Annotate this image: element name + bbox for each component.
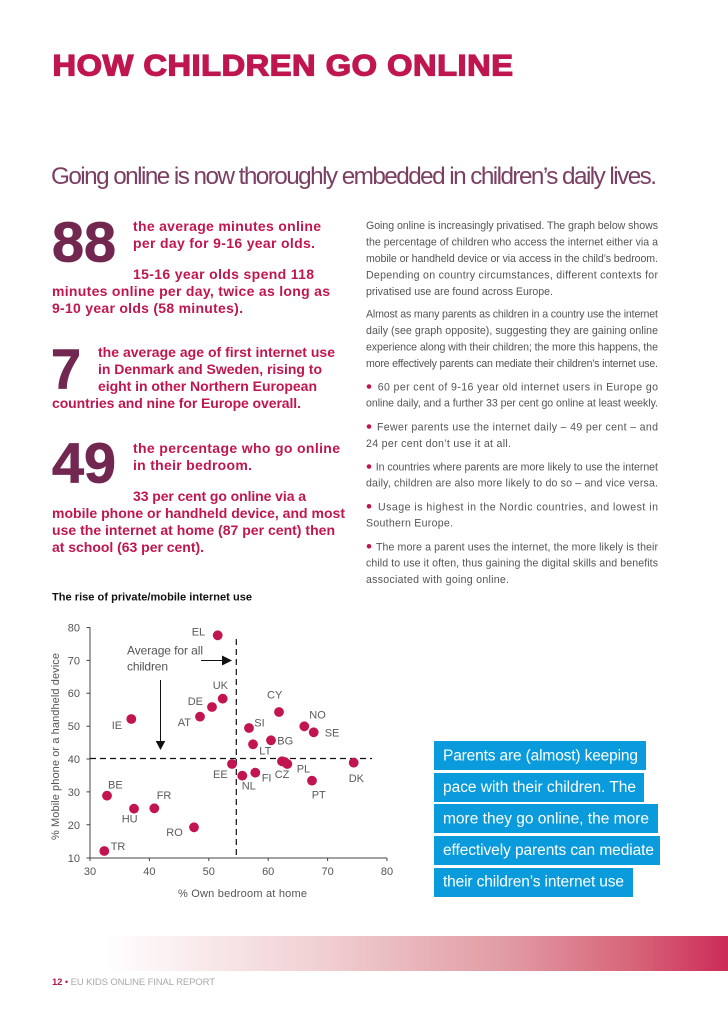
bullet: daily use: online daily, and a further 33 per cent go online at least weekly. xyxy=(366,398,658,410)
country labels: EL xyxy=(192,627,205,639)
big number 49: 49 xyxy=(52,432,116,496)
callout line 2: pace with their children. The xyxy=(443,779,636,796)
y axis title: % Mobile phone or a handheld device xyxy=(50,653,62,840)
country labels: LT xyxy=(259,746,272,758)
stat text: 33 per cent go online via a xyxy=(133,488,306,504)
arrow: right to vertical average xyxy=(201,656,232,666)
x axis tick labels xyxy=(84,866,393,878)
paragraph: privatised use: the percentage of children who access the internet either via a xyxy=(366,236,658,248)
scatter chart xyxy=(50,622,393,900)
bullet: daily use: 60 per cent of 9-16 year old internet users in Europe go xyxy=(378,382,658,394)
arrow: down to horizontal average xyxy=(156,680,165,750)
country labels: DE xyxy=(188,696,203,708)
callout line 4 xyxy=(434,836,660,865)
country labels: EE xyxy=(213,769,228,781)
bullet: Nordic xyxy=(366,502,658,530)
paragraph: privatised use xyxy=(366,220,658,298)
paragraph: parents online: more effectively parents can mediate their children’s internet use. xyxy=(366,358,658,370)
bullet: Nordic: Southern Europe. xyxy=(366,518,453,530)
paragraph: privatised use: privatised use are found across Europe. xyxy=(366,286,553,298)
country labels: FR xyxy=(157,790,171,802)
country data points xyxy=(99,630,359,856)
y axis tick labels: 80 xyxy=(68,622,80,634)
y axis tick labels xyxy=(68,622,80,865)
country labels: CZ xyxy=(275,769,290,781)
bullet: fewer parents: 24 per cent don’t use it at all. xyxy=(366,438,511,450)
callout xyxy=(434,741,660,897)
paragraph: privatised use: Going online is increasingly privatised. The graph below shows xyxy=(366,220,658,232)
average label: Average for all xyxy=(127,644,203,658)
gradient footer band xyxy=(105,936,728,971)
stat text: per day for 9-16 year olds. xyxy=(133,235,315,251)
stat text: the average minutes online xyxy=(133,218,321,234)
x axis tick labels: 30 xyxy=(84,866,96,878)
bullet: fewer parents xyxy=(366,422,658,450)
country labels: RO xyxy=(166,827,183,839)
stat text xyxy=(52,440,345,555)
callout line 2 xyxy=(434,773,644,802)
stat block: 49 per cent xyxy=(52,432,345,555)
country labels: PL xyxy=(297,764,310,776)
country labels: HU xyxy=(122,813,138,825)
paragraph: privatised use: Depending on country circumstances, different contexts for xyxy=(366,270,658,282)
y axis tick labels: 50 xyxy=(68,721,80,733)
x axis tick labels: 40 xyxy=(143,866,156,878)
bullet: daily use xyxy=(366,382,658,410)
country labels: TR xyxy=(111,841,125,853)
footer text: 12 • EU KIDS ONLINE FINAL REPORT xyxy=(52,977,215,988)
stat block: 88 minutes xyxy=(52,210,330,316)
paragraph: privatised use: mobile or handheld device or via access in the child’s bedroom. xyxy=(366,253,658,265)
bullet: digital skills: child to use it often, thus gaining the digital skills and benefits xyxy=(366,558,658,570)
country labels: FI xyxy=(262,772,271,784)
bullet: digital skills: The more a parent uses the internet, the more likely is their xyxy=(376,542,658,554)
country labels: NO xyxy=(309,710,326,722)
bullet: countries: daily, children are also more likely to do so – and vice versa. xyxy=(366,478,658,490)
callout line 4: effectively parents can mediate xyxy=(443,842,654,859)
stat text: 15-16 year olds spend 118 xyxy=(133,266,314,282)
stat text: countries and nine for Europe overall. xyxy=(52,395,301,411)
y axis tick labels: 60 xyxy=(68,688,80,700)
y axis tick labels: 30 xyxy=(68,787,80,799)
stat text: in their bedroom. xyxy=(133,457,252,473)
stat text: 9-10 year olds (58 minutes). xyxy=(52,300,243,316)
x axis tick labels: 80 xyxy=(381,866,393,878)
axes xyxy=(86,628,387,861)
average label xyxy=(127,644,203,674)
callout line 1 xyxy=(434,741,646,770)
subtitle: Going online is now thoroughly embedded in children’s daily lives. xyxy=(51,163,657,190)
big number 7: 7 xyxy=(51,338,81,402)
big number 88: 88 xyxy=(52,210,116,274)
stat text: eight in other Northern European xyxy=(98,378,317,394)
average dashed lines xyxy=(90,639,372,858)
stat text: the average age of first internet use xyxy=(98,344,335,360)
stat text xyxy=(52,218,330,316)
average label: children xyxy=(127,660,168,674)
stat text: minutes online per day, twice as long as xyxy=(52,283,330,299)
x axis title: % Own bedroom at home xyxy=(178,888,307,900)
country labels: NL xyxy=(242,781,256,793)
country labels: UK xyxy=(213,680,229,692)
country labels: AT xyxy=(178,717,191,729)
country labels: IE xyxy=(112,720,122,732)
country labels: BE xyxy=(108,780,123,792)
callout line 1: Parents are (almost) keeping xyxy=(443,748,638,764)
x axis tick labels: 50 xyxy=(203,866,215,878)
country labels: BG xyxy=(277,736,293,748)
callout line 3: more they go online, the more xyxy=(443,810,649,828)
stat text xyxy=(52,344,335,411)
callout line 3 xyxy=(434,804,658,833)
bullet: countries: In countries where parents are more likely to use the internet xyxy=(376,462,658,474)
callout line 5: their children’s internet use xyxy=(443,874,624,891)
stat text: the percentage who go online xyxy=(133,440,340,456)
paragraph: parents online: Almost as many parents as children in a country use the internet xyxy=(366,308,658,320)
y axis tick labels: 70 xyxy=(68,656,80,668)
country labels: CY xyxy=(267,690,283,702)
paragraph: parents online: daily (see graph opposite), suggesting they are gaining online xyxy=(366,325,658,337)
stat text: in Denmark and Sweden, rising to xyxy=(98,361,322,377)
y axis tick labels: 40 xyxy=(68,754,80,766)
country labels: SE xyxy=(325,728,339,740)
bullet: countries xyxy=(366,462,658,490)
stat text: mobile phone or handheld device, and most xyxy=(52,505,345,521)
paragraph: parents online xyxy=(366,308,658,370)
stat text: use the internet at home (87 per cent) then xyxy=(52,522,335,538)
chart heading: The rise of private/mobile internet use xyxy=(52,592,252,604)
country labels: SI xyxy=(254,718,265,730)
paragraph: parents online: experience along with their children; the more this happens, the xyxy=(366,342,658,354)
bullet: fewer parents: Fewer parents use the internet daily – 49 per cent – and xyxy=(377,422,658,434)
y axis tick labels: 20 xyxy=(68,820,80,832)
y axis tick labels: 10 xyxy=(68,853,80,865)
x axis tick labels: 60 xyxy=(262,866,274,878)
stat text: at school (63 per cent). xyxy=(52,539,204,555)
right column body text xyxy=(366,220,658,586)
callout line 5 xyxy=(434,868,633,897)
bullet: digital skills xyxy=(366,542,658,586)
country labels: PT xyxy=(312,790,326,802)
bullet: digital skills: associated with going online. xyxy=(366,574,509,586)
stat block: age 7 xyxy=(51,338,335,411)
title: HOW CHILDREN GO ONLINE xyxy=(52,50,514,82)
country labels xyxy=(108,627,365,853)
country labels: DK xyxy=(349,773,365,785)
x axis tick labels: 70 xyxy=(321,866,334,878)
bullet: Nordic: Usage is highest in the Nordic countries, and lowest in xyxy=(378,502,658,514)
